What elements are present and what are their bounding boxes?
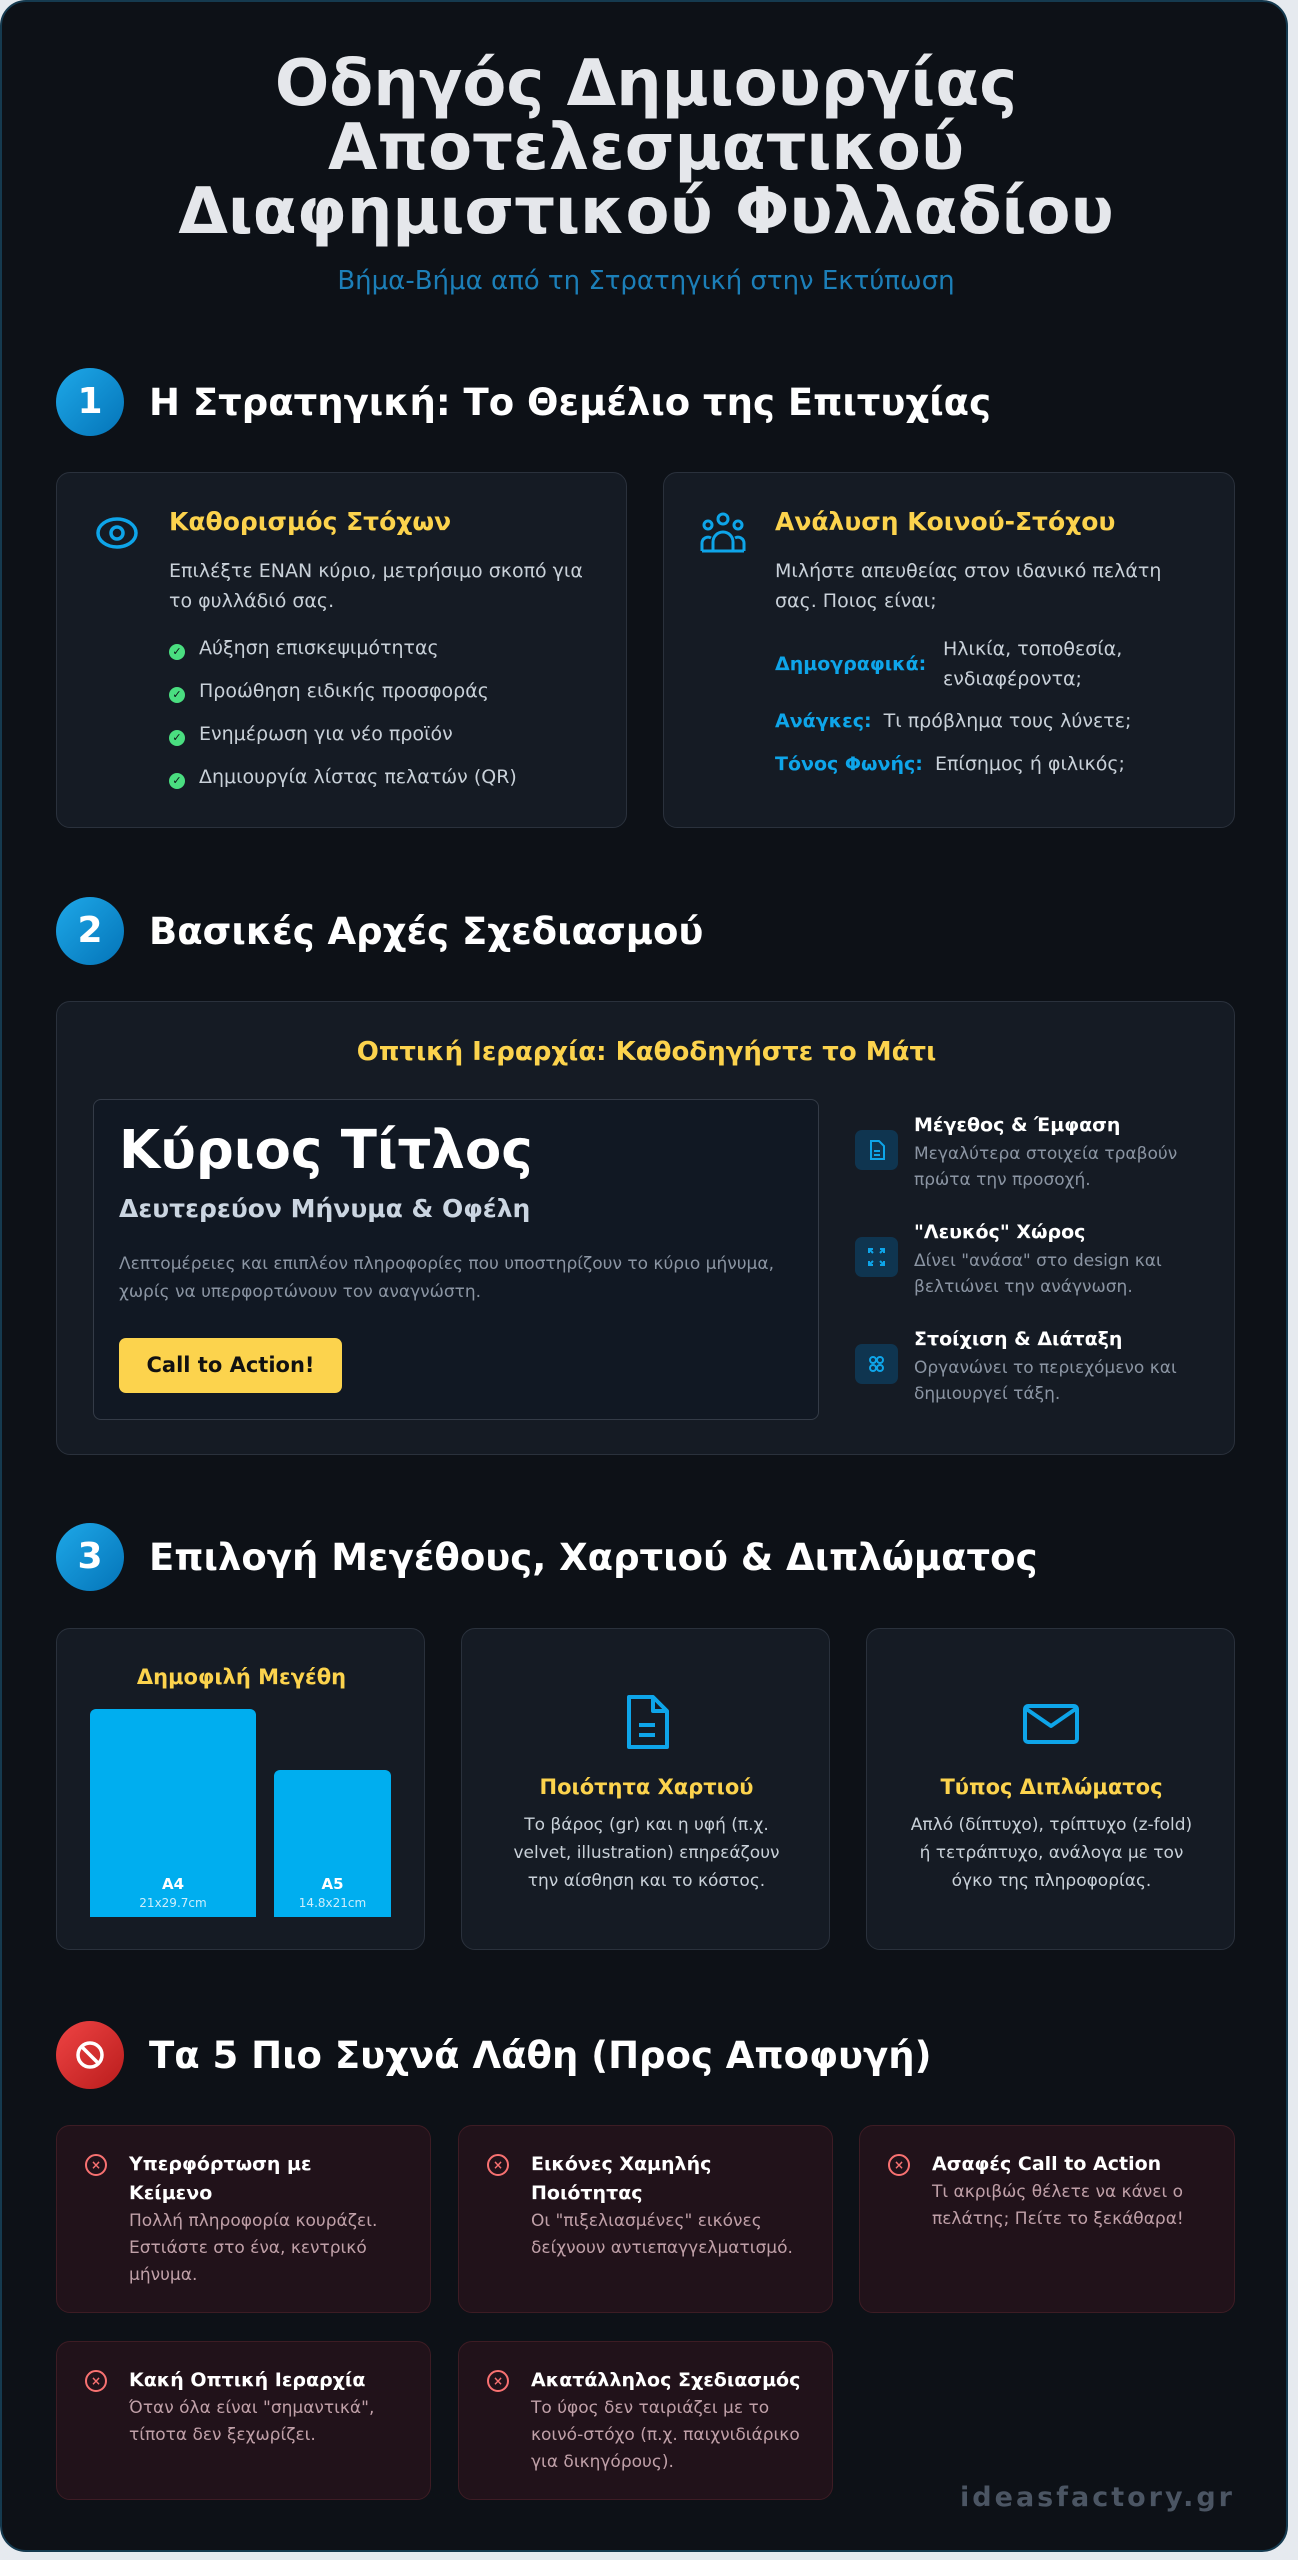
mistake 3: Τι ακριβώς θέλετε να κάνει ο πελάτης; Πείτε το ξεκάθαρα! — [932, 2182, 1184, 2229]
bar A5 — [274, 1770, 391, 1917]
section 1 heading — [56, 368, 991, 436]
mistake 5: × — [493, 2374, 503, 2388]
demographics: Ηλικία, τοποθεσία, ενδιαφέροντα; — [943, 638, 1122, 690]
mock flyer — [93, 1099, 819, 1420]
checklist: ✓ — [172, 645, 182, 658]
panel: sizes: Δημοφιλή Μεγέθη — [137, 1665, 346, 1689]
item: whitespace — [855, 1221, 1162, 1297]
panel: fold: Απλό (δίπτυχο), τρίπτυχο (z-fold) ή τετράπτυχο, ανάλογα με τον όγκο της πληροφορίας. — [911, 1815, 1192, 1891]
section 3 heading — [56, 1523, 1038, 1591]
demographics: Τόνος Φωνής: Επίσημος ή φιλικός; — [775, 753, 1125, 775]
checklist: ✓ — [172, 731, 182, 744]
panel: paper — [461, 1628, 830, 1950]
panel: fold: Τύπος Διπλώματος — [940, 1775, 1163, 1799]
text: Μιλήστε απευθείας στον ιδανικό πελάτη σας. Ποιος είναι; — [775, 560, 1161, 612]
mistake 2: Οι "πιξελιασμένες" εικόνες δείχνουν αντιεπαγγελματισμό. — [531, 2211, 793, 2258]
demographics — [775, 638, 1131, 775]
mistake 4: × — [91, 2374, 101, 2388]
mistake 5 — [458, 2341, 833, 2500]
mistake 3 — [859, 2125, 1235, 2313]
item: size: Μεγαλύτερα στοιχεία τραβούν πρώτα την προσοχή. — [914, 1144, 1177, 1190]
title: Οδηγός Δημιουργίας — [275, 47, 1017, 121]
section 4 heading: Τα 5 Πιο Συχνά Λάθη (Προς Αποφυγή) — [149, 2034, 931, 2077]
checklist: ✓ — [172, 774, 182, 787]
checklist: ✓ — [172, 688, 182, 701]
icon: document — [627, 1695, 669, 1749]
heading: Ανάλυση Κοινού-Στόχου — [775, 507, 1115, 536]
item: whitespace: Δίνει "ανάσα" στο design και βελτιώνει την ανάγνωση. — [914, 1251, 1162, 1297]
item: size: Μέγεθος & Έμφαση — [914, 1114, 1120, 1136]
section 3 heading: Επιλογή Μεγέθους, Χαρτιού & Διπλώματος — [149, 1536, 1038, 1579]
CTA button: Call to Action! — [147, 1353, 314, 1377]
icon: envelope — [1023, 1704, 1079, 1744]
mistake 5: Το ύφος δεν ταιριάζει με το κοινό-στόχο (π.χ. παιχνιδιάρικο για δικηγόρους). — [531, 2398, 800, 2472]
mistake 2 — [458, 2125, 833, 2313]
section 3 heading: 3 — [77, 1536, 103, 1577]
section 1 heading: 1 — [77, 381, 103, 422]
panel: audience — [663, 472, 1235, 828]
title: Αποτελεσματικού — [328, 111, 964, 185]
mistake 3: Ασαφές Call to Action — [932, 2153, 1161, 2175]
section 2 heading: Βασικές Αρχές Σχεδιασμού — [149, 910, 703, 953]
panel: paper: Ποιότητα Χαρτιού — [540, 1775, 753, 1799]
mistake 1 — [56, 2125, 431, 2313]
section 2 heading: 2 — [77, 910, 103, 951]
mistake 4 — [56, 2341, 431, 2500]
section 1 heading: Η Στρατηγική: Το Θεμέλιο της Επιτυχίας — [149, 381, 991, 424]
mistake 1: Κείμενο — [129, 2182, 212, 2204]
mock flyer: Κύριος Τίτλος — [119, 1120, 533, 1181]
mock flyer: Λεπτομέρειες και επιπλέον πληροφορίες που υποστηρίζουν το κύριο μήνυμα, χωρίς να υπερφορτώνουν τον αναγνώστη. — [119, 1254, 774, 1302]
bar A4: A4 — [162, 1875, 184, 1893]
checklist: Αύξηση επισκεψιμότητας — [199, 637, 439, 659]
icon: no sign — [56, 2021, 124, 2089]
heading: Καθορισμός Στόχων — [169, 507, 451, 536]
checklist: Δημιουργία λίστας πελατών (QR) — [199, 766, 517, 788]
mistake 1: × — [91, 2158, 101, 2172]
mistake 2: × — [493, 2158, 503, 2172]
section 4 heading — [56, 2021, 931, 2089]
item: alignment — [855, 1328, 1177, 1404]
item: alignment: Στοίχιση & Διάταξη — [914, 1328, 1122, 1350]
section 2 heading — [56, 897, 703, 965]
text: Επιλέξτε ΕΝΑΝ κύριο, μετρήσιμο σκοπό για το φυλλάδιό σας. — [169, 560, 583, 612]
checklist — [169, 637, 517, 789]
bar A5: A5 — [321, 1875, 344, 1893]
item: alignment: Οργανώνει το περιεχόμενο και δημιουργεί τάξη. — [914, 1358, 1177, 1404]
mistake 4: Όταν όλα είναι "σημαντικά", τίποτα δεν ξεχωρίζει. — [129, 2398, 374, 2445]
CTA button — [119, 1338, 342, 1393]
bar A4 — [90, 1709, 256, 1917]
mistake 2: Ποιότητας — [531, 2182, 643, 2204]
item: whitespace: "Λευκός" Χώρος — [914, 1221, 1085, 1243]
panel: sizes — [56, 1628, 425, 1950]
mistake 2: Εικόνες Χαμηλής — [531, 2153, 711, 2175]
mistake 3: × — [894, 2158, 904, 2172]
panel: fold — [866, 1628, 1235, 1950]
title — [178, 47, 1114, 249]
checklist: Προώθηση ειδικής προσφοράς — [199, 680, 489, 702]
panel: visual hierarchy — [56, 1001, 1235, 1455]
bar A4: 21x29.7cm — [139, 1896, 207, 1910]
demographics: Δημογραφικά: — [775, 653, 926, 675]
mistake 1: Υπερφόρτωση με — [129, 2153, 312, 2175]
mistake 5: Ακατάλληλος Σχεδιασμός — [531, 2369, 800, 2391]
panel: goals — [56, 472, 627, 828]
mock flyer: Δευτερεύον Μήνυμα & Οφέλη — [119, 1194, 530, 1223]
checklist: Ενημέρωση για νέο προϊόν — [199, 723, 453, 745]
icon: users — [700, 512, 746, 552]
item: size — [855, 1114, 1177, 1190]
icon: eye — [96, 517, 138, 549]
mistake 4: Κακή Οπτική Ιεραρχία — [129, 2369, 365, 2391]
bar A5: 14.8x21cm — [299, 1896, 366, 1910]
subtitle: Βήμα-Βήμα από τη Στρατηγική στην Εκτύπωση — [337, 266, 955, 296]
mistake 1: Πολλή πληροφορία κουράζει. Εστιάστε στο ένα, κεντρικό μήνυμα. — [129, 2211, 377, 2285]
title: Διαφημιστικού Φυλλαδίου — [178, 175, 1114, 249]
heading: Οπτική Ιεραρχία: Καθοδηγήστε το Μάτι — [357, 1037, 936, 1067]
panel: paper: Το βάρος (gr) και η υφή (π.χ. velvet, illustration) επηρεάζουν την αίσθηση και το κόστος. — [513, 1815, 780, 1891]
demographics: Ανάγκες: Τι πρόβλημα τους λύνετε; — [775, 710, 1131, 732]
footer brand: ideasfactory.gr — [960, 2482, 1235, 2513]
